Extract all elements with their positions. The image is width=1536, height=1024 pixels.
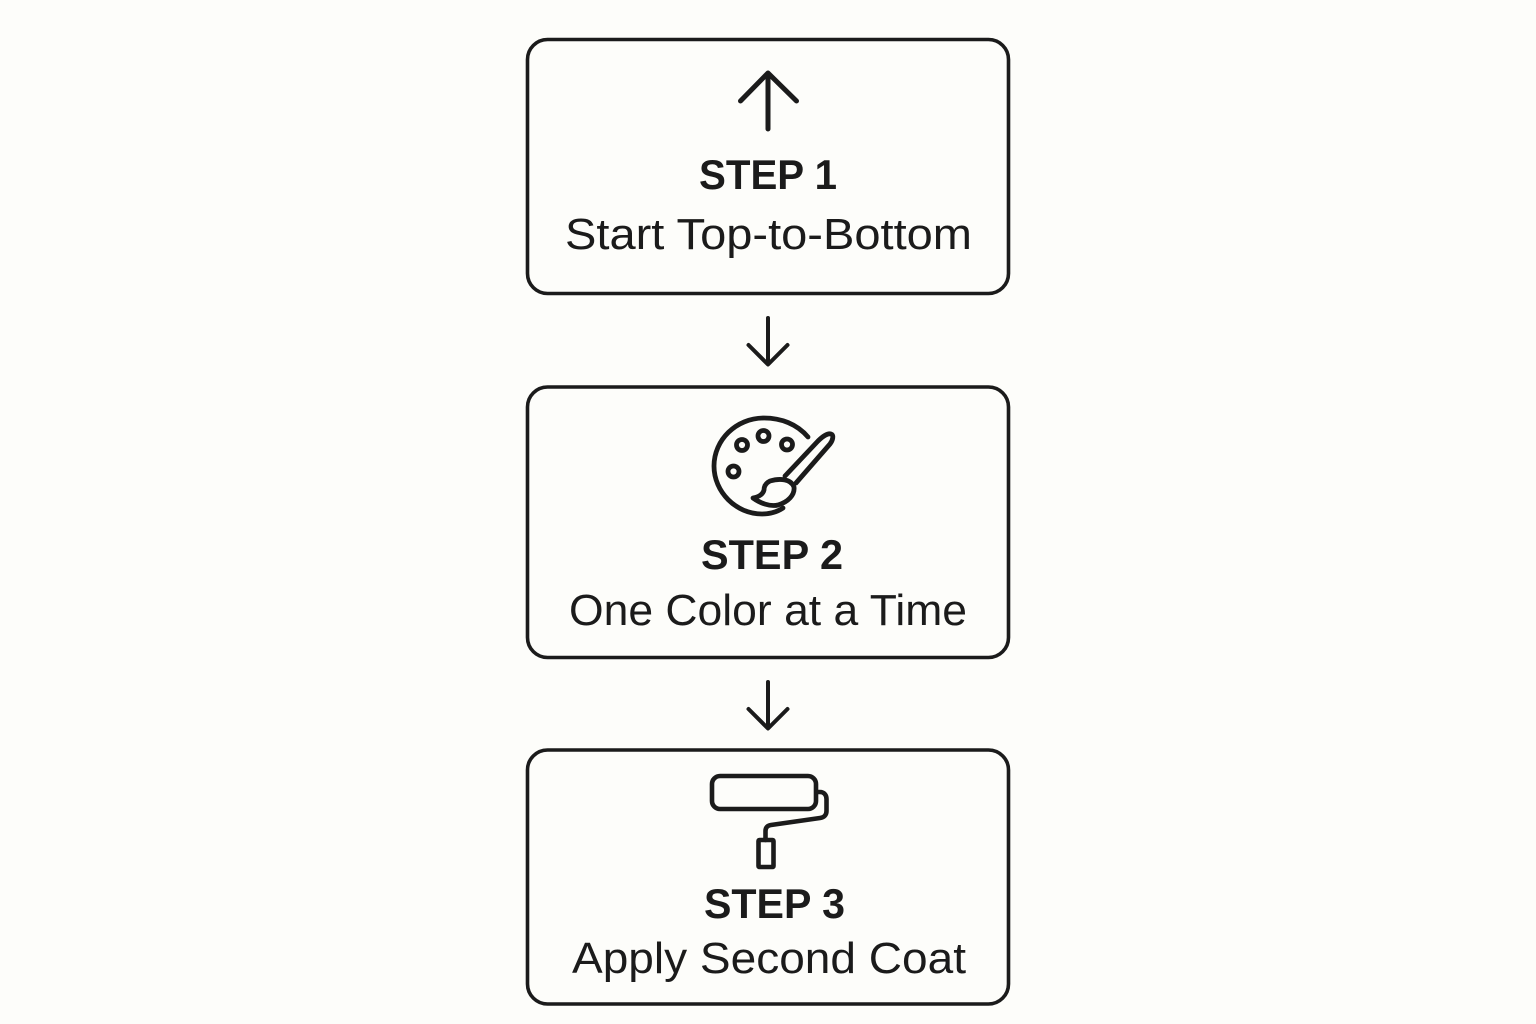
panel: step 3 <box>528 750 1008 1004</box>
panel: step 2 <box>528 387 1008 658</box>
icon: paint roller <box>712 776 826 867</box>
panel: step 1 <box>528 40 1008 294</box>
text: apply second coat: Apply Second Coat <box>572 934 966 983</box>
heading: step 3: STEP 3 <box>704 880 845 927</box>
icon: up arrow <box>740 73 796 129</box>
arrow: step 2 to step 3 <box>748 682 788 728</box>
heading: step 1: STEP 1 <box>699 151 837 198</box>
text: start top-to-bottom: Start Top-to-Bottom <box>565 210 972 259</box>
heading: step 2: STEP 2 <box>701 531 843 578</box>
arrow: step 1 to step 2 <box>748 318 788 364</box>
text: one color at a time: One Color at a Time <box>569 586 967 635</box>
icon: palette and brush <box>714 418 833 514</box>
